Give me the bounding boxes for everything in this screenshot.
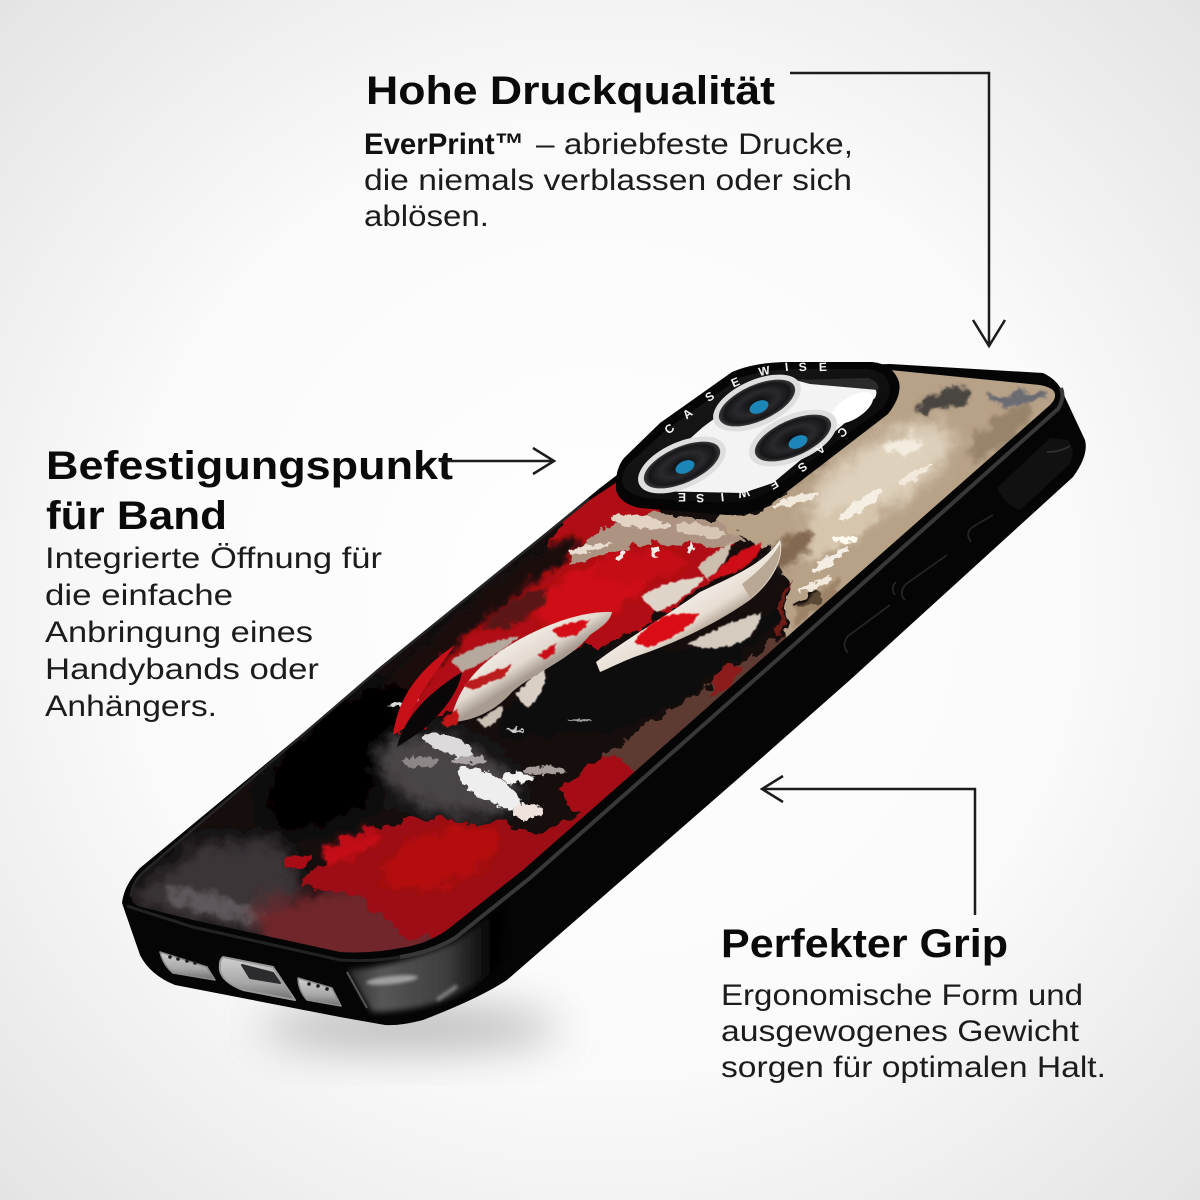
- brand ring text: S: [696, 491, 704, 505]
- print artwork: koi: [132, 370, 1056, 952]
- lens left: [630, 425, 734, 505]
- brand ring text: C: [834, 424, 850, 441]
- lens right: [741, 398, 845, 478]
- arrow: to phone side: [762, 776, 975, 915]
- callout: print quality: [364, 69, 853, 233]
- phone case: [100, 340, 1100, 1025]
- brand ring text: W: [736, 485, 751, 501]
- description: Anbringung eines: [45, 616, 313, 649]
- camera bump: [616, 360, 900, 515]
- description: die niemals verblassen oder sich: [364, 164, 852, 197]
- description: ausgewogenes Gewicht: [721, 1015, 1080, 1048]
- description: EverPrint™: [364, 128, 524, 161]
- splash and droplets: [387, 463, 933, 819]
- description: [721, 979, 1106, 1084]
- brand ring text: I: [784, 360, 789, 374]
- koi fish right: [596, 540, 781, 672]
- brand ring text: E: [729, 374, 742, 390]
- callout: grip: [721, 922, 1106, 1084]
- description: [364, 128, 853, 233]
- brand ring text: A: [680, 405, 696, 422]
- buttons and side details: [844, 438, 1073, 653]
- bumper rim highlight: [127, 388, 1062, 961]
- description: [45, 542, 382, 723]
- phone shadow: [260, 1006, 560, 1050]
- description: – abriebfeste Drucke,: [536, 128, 853, 161]
- brand ring text: E: [678, 490, 686, 504]
- heading: für Band: [46, 494, 227, 538]
- brand ring text: E: [767, 476, 781, 493]
- brand ring text: S: [798, 360, 807, 374]
- heading: Befestigungspunkt: [46, 444, 453, 488]
- arrow: to camera bump: [440, 448, 554, 474]
- lens top: [705, 363, 809, 443]
- brand ring text: S: [703, 389, 717, 405]
- brand ring text: A: [812, 441, 828, 458]
- heading: [46, 444, 453, 538]
- description: sorgen für optimalen Halt.: [721, 1051, 1106, 1084]
- brand ring text: E: [819, 360, 827, 374]
- camera window: [640, 380, 876, 493]
- charging port and speakers: [160, 952, 341, 1006]
- description: Ergonomische Form und: [721, 979, 1083, 1012]
- print colour fields: [132, 370, 1056, 952]
- heading: Perfekter Grip: [721, 922, 1008, 966]
- case body: [122, 364, 1086, 1025]
- brand ring text: [662, 360, 850, 505]
- description: die einfache: [45, 579, 233, 612]
- arrow: to top of phone: [790, 73, 1005, 346]
- brand ring text: C: [662, 421, 678, 437]
- brand ring text: W: [757, 363, 772, 379]
- callout: strap attachment: [45, 444, 453, 723]
- brand ring text: S: [795, 459, 810, 475]
- description: Integrierte Öffnung für: [45, 542, 382, 575]
- koi fish left: [393, 612, 612, 747]
- brand ring text: I: [720, 490, 725, 504]
- description: ablösen.: [364, 200, 489, 233]
- corner gloss: [347, 905, 505, 1012]
- description: Anhängers.: [45, 690, 217, 723]
- heading: Hohe Druckqualität: [366, 69, 775, 113]
- description: Handybands oder: [45, 653, 319, 686]
